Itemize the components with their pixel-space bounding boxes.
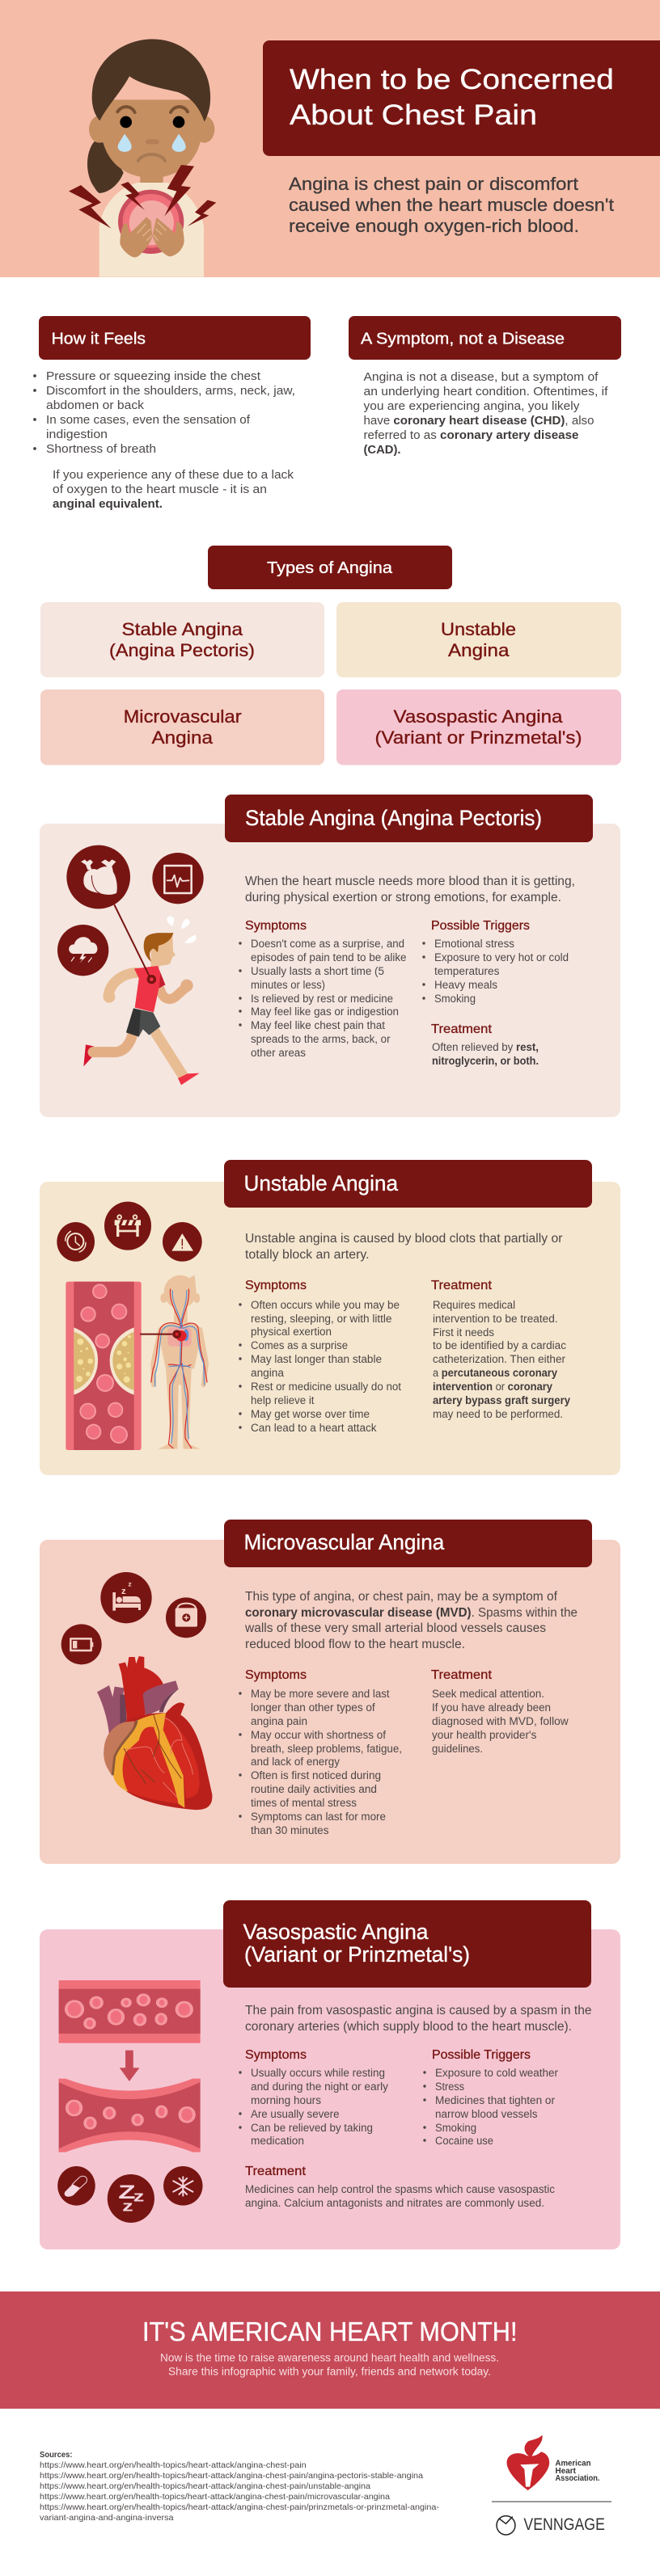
list: how it feels <box>33 370 295 456</box>
text: a symptom: Angina is not a disease, but a symptom of <box>364 371 599 384</box>
icons: bed, first aid kit, battery: z <box>128 1579 132 1587</box>
heading: vasospastic angina: Vasospastic Angina <box>243 1920 429 1944</box>
text: treatment: Treatment <box>431 1022 493 1036</box>
intro: microvascular angina: reduced blood flow to the heart muscle. <box>245 1638 465 1651</box>
sources <box>40 2450 440 2523</box>
text: a symptom: referred to as coronary artery disease <box>364 429 579 442</box>
text: treatment: guidelines. <box>432 1743 483 1755</box>
list: possible triggers: Possible Triggers <box>431 919 530 933</box>
text: treatment: catheterization. Then either <box>433 1353 565 1365</box>
intro: microvascular angina: coronary microvascular disease (MVD). Spasms within the <box>245 1606 578 1620</box>
text: anginal equivalent: If you experience any of these due to a lack <box>53 469 294 482</box>
text: a symptom: have coronary heart disease (CHD) , also <box>364 415 594 428</box>
intro: vasospastic angina: coronary arteries (which supply blood to the heart muscle). <box>245 2020 572 2034</box>
intro: vasospastic angina: The pain from vasospastic angina is caused by a spasm in the <box>245 2004 592 2017</box>
card: microvascular angina <box>40 689 324 765</box>
list: symptoms: morning hours <box>251 2094 321 2106</box>
text: treatment <box>245 2165 555 2209</box>
list: symptoms: Symptoms <box>245 2048 307 2062</box>
title: When to be Concerned <box>290 64 614 95</box>
heading: stable angina <box>225 795 593 842</box>
text: a symptom: an underlying heart condition. Oftentimes, if <box>364 386 609 398</box>
panel: vasospastic angina <box>40 1900 620 2249</box>
text: treatment <box>431 1668 569 1755</box>
heading: unstable angina: Unstable Angina <box>244 1171 399 1195</box>
text: treatment: intervention or coronary <box>433 1381 552 1393</box>
card: microvascular angina: Microvascular <box>124 706 242 727</box>
list: possible triggers: Heavy meals <box>434 979 497 991</box>
heading: a symptom <box>349 316 621 360</box>
title: About Chest Pain <box>290 99 537 131</box>
text: treatment: intervention to be treated. <box>433 1313 558 1325</box>
list: possible triggers <box>422 919 569 1005</box>
list: symptoms: Often is first noticed during <box>251 1769 381 1781</box>
list: symptoms: Usually occurs while resting <box>251 2067 385 2079</box>
card: microvascular angina: Angina <box>152 727 214 748</box>
panel: unstable angina <box>40 1160 620 1475</box>
icons: bed, first aid kit, battery <box>61 1572 206 1664</box>
sources: https://www.heart.org/en/health-topics/heart-attack/angina-chest-pain/microvascular-angina <box>40 2492 390 2502</box>
list: symptoms: Doesn't come as a surprise, and <box>251 938 404 950</box>
intro text: caused when the heart muscle doesn't <box>289 195 614 215</box>
list: symptoms: angina <box>251 1367 284 1379</box>
list: how it feels: Discomfort in the shoulders, arms, neck, jaw, <box>46 385 295 398</box>
list: symptoms: than 30 minutes <box>251 1824 329 1836</box>
list: possible triggers: Stress <box>435 2081 464 2093</box>
list: symptoms: Is relieved by rest or medicine <box>251 993 393 1005</box>
heading: vasospastic angina <box>223 1900 591 1988</box>
text: treatment: Treatment <box>245 2165 307 2178</box>
intro: microvascular angina <box>244 1590 578 1651</box>
text: treatment: Treatment <box>431 1279 493 1292</box>
list: symptoms: Are usually severe <box>251 2108 340 2120</box>
text: a symptom <box>364 371 609 457</box>
list: symptoms <box>239 919 406 1059</box>
list: possible triggers: Smoking <box>434 993 476 1005</box>
list: possible triggers: Medicines that tighten or <box>435 2094 555 2106</box>
logo: venngage <box>497 2515 605 2535</box>
list: symptoms: May be more severe and last <box>251 1688 390 1700</box>
intro: microvascular angina: This type of angina, or chest pain, may be a symptom of <box>245 1590 558 1604</box>
card: vasospastic angina: Vasospastic Angina <box>393 706 563 727</box>
illustration: artery narrowing and icons: z <box>133 2187 144 2204</box>
list: how it feels: indigestion <box>46 428 108 441</box>
list: symptoms: May occur with shortness of <box>251 1729 386 1741</box>
heading: how it feels <box>39 316 311 360</box>
text: treatment: Treatment <box>431 1668 493 1682</box>
panel: how it feels <box>33 316 311 511</box>
text: treatment: to be identified by a cardiac <box>433 1339 566 1351</box>
panel: stable angina <box>40 795 620 1117</box>
logo: venngage: VENNGAGE <box>523 2515 605 2534</box>
list: symptoms: routine daily activities and <box>251 1783 377 1795</box>
card: vasospastic angina: (Variant or Prinzmetal's) <box>375 727 582 748</box>
banner: american heart month <box>0 2291 660 2409</box>
logo: american heart association: Heart <box>555 2467 577 2476</box>
text: treatment <box>431 1279 570 1420</box>
list: symptoms: angina pain <box>251 1715 307 1727</box>
list: symptoms: and lack of energy <box>251 1756 340 1768</box>
title <box>263 40 660 156</box>
intro text: Angina is chest pain or discomfort <box>289 174 578 194</box>
text: treatment: angina. Calcium antagonists and nitrates are commonly used. <box>245 2197 544 2209</box>
list: symptoms: help relieve it <box>251 1394 315 1406</box>
logo: american heart association: Association. <box>555 2474 600 2483</box>
list: possible triggers: narrow blood vessels <box>435 2108 538 2120</box>
list: symptoms: breath, sleep problems, fatigue, <box>251 1743 402 1755</box>
card: unstable angina: Angina <box>448 640 510 660</box>
text: treatment: Medicines can help control the spasms which cause vasospastic <box>245 2183 555 2195</box>
list: symptoms: Symptoms <box>245 919 307 933</box>
list: symptoms: minutes or less) <box>251 979 325 991</box>
heading: unstable angina <box>224 1160 592 1208</box>
text: treatment: Requires medical <box>433 1299 515 1311</box>
card: stable angina: (Angina Pectoris) <box>109 640 255 660</box>
intro: unstable angina <box>245 1232 563 1262</box>
list: symptoms: Symptoms <box>245 1668 307 1682</box>
list: possible triggers: Cocaine use <box>435 2135 493 2147</box>
list: symptoms: spreads to the arms, back, or <box>251 1033 391 1045</box>
list: how it feels: Shortness of breath <box>46 443 156 456</box>
list: how it feels: abdomen or back <box>46 399 145 412</box>
heading: microvascular angina: Microvascular Angina <box>244 1530 445 1554</box>
list: symptoms: Can lead to a heart attack <box>251 1422 377 1434</box>
text: treatment: First it needs <box>433 1326 494 1339</box>
heading: stable angina: Stable Angina (Angina Pectoris) <box>245 806 542 830</box>
list: symptoms: Symptoms <box>245 1279 307 1292</box>
intro: stable angina <box>245 875 575 904</box>
text: treatment: nitroglycerin, or both. <box>432 1055 539 1067</box>
illustration: artery narrowing and icons: Z <box>118 2182 136 2203</box>
text: treatment: a percutaneous coronary <box>433 1367 557 1379</box>
list: possible triggers: Exposure to cold weather <box>435 2067 558 2079</box>
list: symptoms: longer than other types of <box>251 1701 375 1714</box>
intro text <box>289 174 614 236</box>
illustration: artery narrowing and icons <box>57 1980 203 2223</box>
panel: a symptom, not a disease <box>349 316 621 457</box>
list: symptoms: and during the night or early <box>251 2081 388 2093</box>
list: possible triggers <box>423 2048 558 2147</box>
text: treatment: If you have already been <box>432 1701 551 1714</box>
intro: stable angina: during physical exertion or strong emotions, for example. <box>245 891 561 904</box>
card: unstable angina: Unstable <box>441 619 516 639</box>
list: symptoms <box>239 2048 388 2147</box>
sources: https://www.heart.org/en/health-topics/heart-attack/angina-chest-pain/angina-pectoris-stable-angina <box>40 2471 423 2481</box>
illustration: artery narrowing and icons: z <box>122 2198 133 2215</box>
list: possible triggers: Possible Triggers <box>432 2048 531 2062</box>
list: symptoms: Often occurs while you may be <box>251 1299 400 1311</box>
list: symptoms: medication <box>251 2135 304 2147</box>
illustration: running man with icons <box>57 845 204 1085</box>
heading: types of angina <box>208 546 452 589</box>
text: anginal equivalent: of oxygen to the heart muscle - it is an <box>53 483 267 496</box>
list: possible triggers: Exposure to very hot or cold <box>434 951 569 963</box>
intro: unstable angina: Unstable angina is caused by blood clots that partially or <box>245 1232 563 1246</box>
card: stable angina <box>40 602 324 677</box>
list: how it feels: Pressure or squeezing inside the chest <box>46 370 260 383</box>
list: symptoms <box>239 1668 402 1836</box>
text: treatment: may need to be performed. <box>433 1408 563 1420</box>
list: how it feels: In some cases, even the sensation of <box>46 414 251 427</box>
text: treatment: diagnosed with MVD, follow <box>432 1715 569 1727</box>
list: symptoms: Comes as a surprise <box>251 1339 348 1351</box>
card: unstable angina <box>336 602 621 677</box>
card: stable angina: Stable Angina <box>121 619 243 639</box>
text: treatment <box>431 1022 539 1067</box>
sources: variant-angina-and-angina-inversa <box>40 2513 174 2523</box>
list: symptoms: resting, sleeping, or with little <box>251 1313 391 1325</box>
list: symptoms: Usually lasts a short time (5 <box>251 965 384 977</box>
banner: american heart month: Now is the time to raise awareness around heart health and wellness. <box>160 2352 499 2364</box>
text: treatment: Seek medical attention. <box>432 1688 544 1700</box>
list: symptoms: times of mental stress <box>251 1797 357 1809</box>
illustration: icons, artery and body <box>57 1202 207 1450</box>
list: symptoms: May get worse over time <box>251 1408 370 1420</box>
text: anginal equivalent: anginal equivalent. <box>53 498 163 511</box>
illustration: woman with chest pain <box>69 39 216 277</box>
list: symptoms: May feel like chest pain that <box>251 1019 385 1031</box>
list: symptoms: Can be relieved by taking <box>251 2122 373 2134</box>
card: vasospastic angina <box>336 689 621 765</box>
list: possible triggers: Emotional stress <box>434 938 514 950</box>
sources: Sources: <box>40 2450 73 2460</box>
illustration: heart <box>97 1656 212 1810</box>
list: possible triggers: temperatures <box>434 965 500 977</box>
intro text: receive enough oxygen-rich blood. <box>289 216 579 236</box>
sources: https://www.heart.org/en/health-topics/heart-attack/angina-chest-pain <box>40 2460 307 2470</box>
intro: unstable angina: totally block an artery. <box>245 1248 370 1262</box>
list: symptoms: May last longer than stable <box>251 1353 382 1365</box>
heading: microvascular angina <box>224 1520 592 1567</box>
sources: https://www.heart.org/en/health-topics/heart-attack/angina-chest-pain/unstable-angina <box>40 2481 370 2491</box>
logo: american heart association <box>507 2435 600 2490</box>
intro: microvascular angina: walls of these very small arterial blood vessels causes <box>244 1621 546 1635</box>
banner: american heart month: Share this infographic with your family, friends and network today. <box>168 2366 491 2378</box>
banner: american heart month: IT'S AMERICAN HEART MONTH! <box>142 2317 518 2346</box>
list: symptoms: other areas <box>251 1047 306 1059</box>
list: symptoms: Rest or medicine usually do not <box>251 1381 401 1393</box>
list: symptoms: episodes of pain tend to be alike <box>251 951 406 963</box>
panel: microvascular angina <box>40 1520 620 1864</box>
sources: https://www.heart.org/en/health-topics/heart-attack/angina-chest-pain/prinzmetals-or-prinzmetal-angina- <box>40 2502 440 2512</box>
text: anginal equivalent <box>53 469 294 511</box>
list: symptoms <box>239 1279 401 1434</box>
list: possible triggers: Smoking <box>435 2122 476 2134</box>
icons: bed, first aid kit, battery: z <box>121 1587 126 1596</box>
text: a symptom: you are experiencing angina, you likely <box>364 400 580 413</box>
text: treatment: artery bypass graft surgery <box>433 1394 570 1406</box>
heading: vasospastic angina: (Variant or Prinzmetal's) <box>244 1942 470 1967</box>
heading: how it feels: How it Feels <box>52 330 146 348</box>
heading: types of angina: Types of Angina <box>267 559 393 577</box>
text: a symptom: (CAD). <box>364 444 401 457</box>
logo: american heart association: American <box>555 2460 590 2468</box>
intro: stable angina: When the heart muscle needs more blood than it is getting, <box>245 875 575 888</box>
list: symptoms: Symptoms can last for more <box>251 1811 386 1823</box>
list: symptoms: May feel like gas or indigestion <box>251 1006 399 1018</box>
header panel <box>0 0 660 277</box>
heading: a symptom: A Symptom, not a Disease <box>361 330 565 348</box>
intro: vasospastic angina <box>245 2004 592 2034</box>
text: treatment: Often relieved by rest, <box>432 1041 539 1053</box>
text: treatment: your health provider's <box>432 1729 537 1741</box>
list: symptoms: physical exertion <box>251 1326 332 1338</box>
